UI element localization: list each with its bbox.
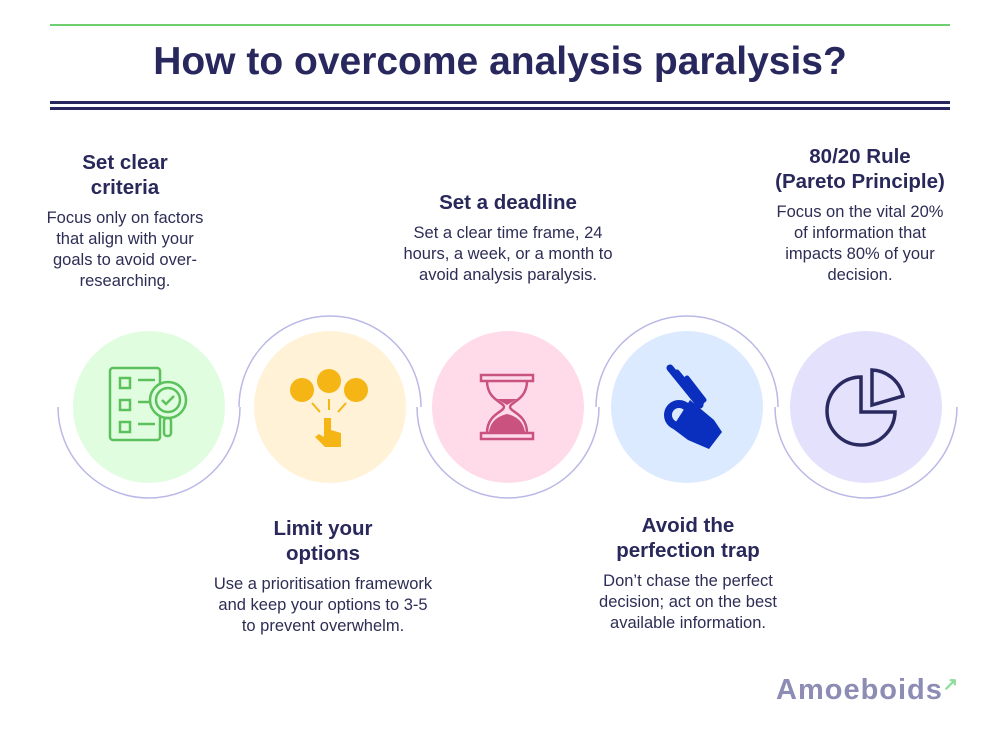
circle: pareto <box>790 331 942 483</box>
text: 80/20 rule: Focus on the vital 20% <box>777 203 943 221</box>
text: set clear criteria: Set clear <box>82 151 168 174</box>
text: set a deadline <box>403 191 613 284</box>
text: avoid perfection trap: Avoid the <box>642 514 734 537</box>
text: set clear criteria: criteria <box>91 176 159 199</box>
text: avoid perfection trap: available information. <box>610 614 766 632</box>
text: 80/20 rule: of information that <box>794 224 926 242</box>
circle: criteria <box>73 331 225 483</box>
text: set a deadline: Set a deadline <box>439 191 577 214</box>
top green line <box>50 24 950 26</box>
text: 80/20 rule <box>775 145 945 284</box>
text: limit your options: options <box>286 542 360 565</box>
text: avoid perfection trap: perfection trap <box>616 539 760 562</box>
text: set clear criteria: that align with your <box>56 230 194 248</box>
circle: options <box>254 331 406 483</box>
text: limit your options: and keep your options to 3-5 <box>218 596 428 614</box>
text: set clear criteria <box>47 151 203 290</box>
text: 80/20 rule: impacts 80% of your <box>785 245 935 263</box>
text: avoid perfection trap: decision; act on the best <box>599 593 777 611</box>
double rule <box>50 101 950 110</box>
text: limit your options: Use a prioritisation framework <box>214 575 432 593</box>
circle: deadline <box>432 331 584 483</box>
text: set a deadline: avoid analysis paralysis. <box>419 266 597 284</box>
text: set clear criteria: goals to avoid over- <box>53 251 197 269</box>
text: 80/20 rule: decision. <box>827 266 893 284</box>
text: limit your options <box>214 517 432 635</box>
text: set clear criteria: Focus only on factors <box>47 209 203 227</box>
text: 80/20 rule: 80/20 Rule <box>809 145 911 168</box>
text: set a deadline: hours, a week, or a month to <box>403 245 613 263</box>
text: avoid perfection trap: Don’t chase the perfect <box>603 572 773 590</box>
text: limit your options: Limit your <box>273 517 373 540</box>
text: limit your options: to prevent overwhelm. <box>242 617 404 635</box>
text: 80/20 rule: (Pareto Principle) <box>775 170 945 193</box>
text: avoid perfection trap <box>599 514 777 632</box>
circle: perfection (ok hand) <box>611 331 763 483</box>
title: How to overcome analysis paralysis? <box>153 40 847 83</box>
logo: Amoeboids↗ <box>776 674 959 706</box>
text: set clear criteria: researching. <box>80 272 170 290</box>
text: set a deadline: Set a clear time frame, 24 <box>414 224 602 242</box>
